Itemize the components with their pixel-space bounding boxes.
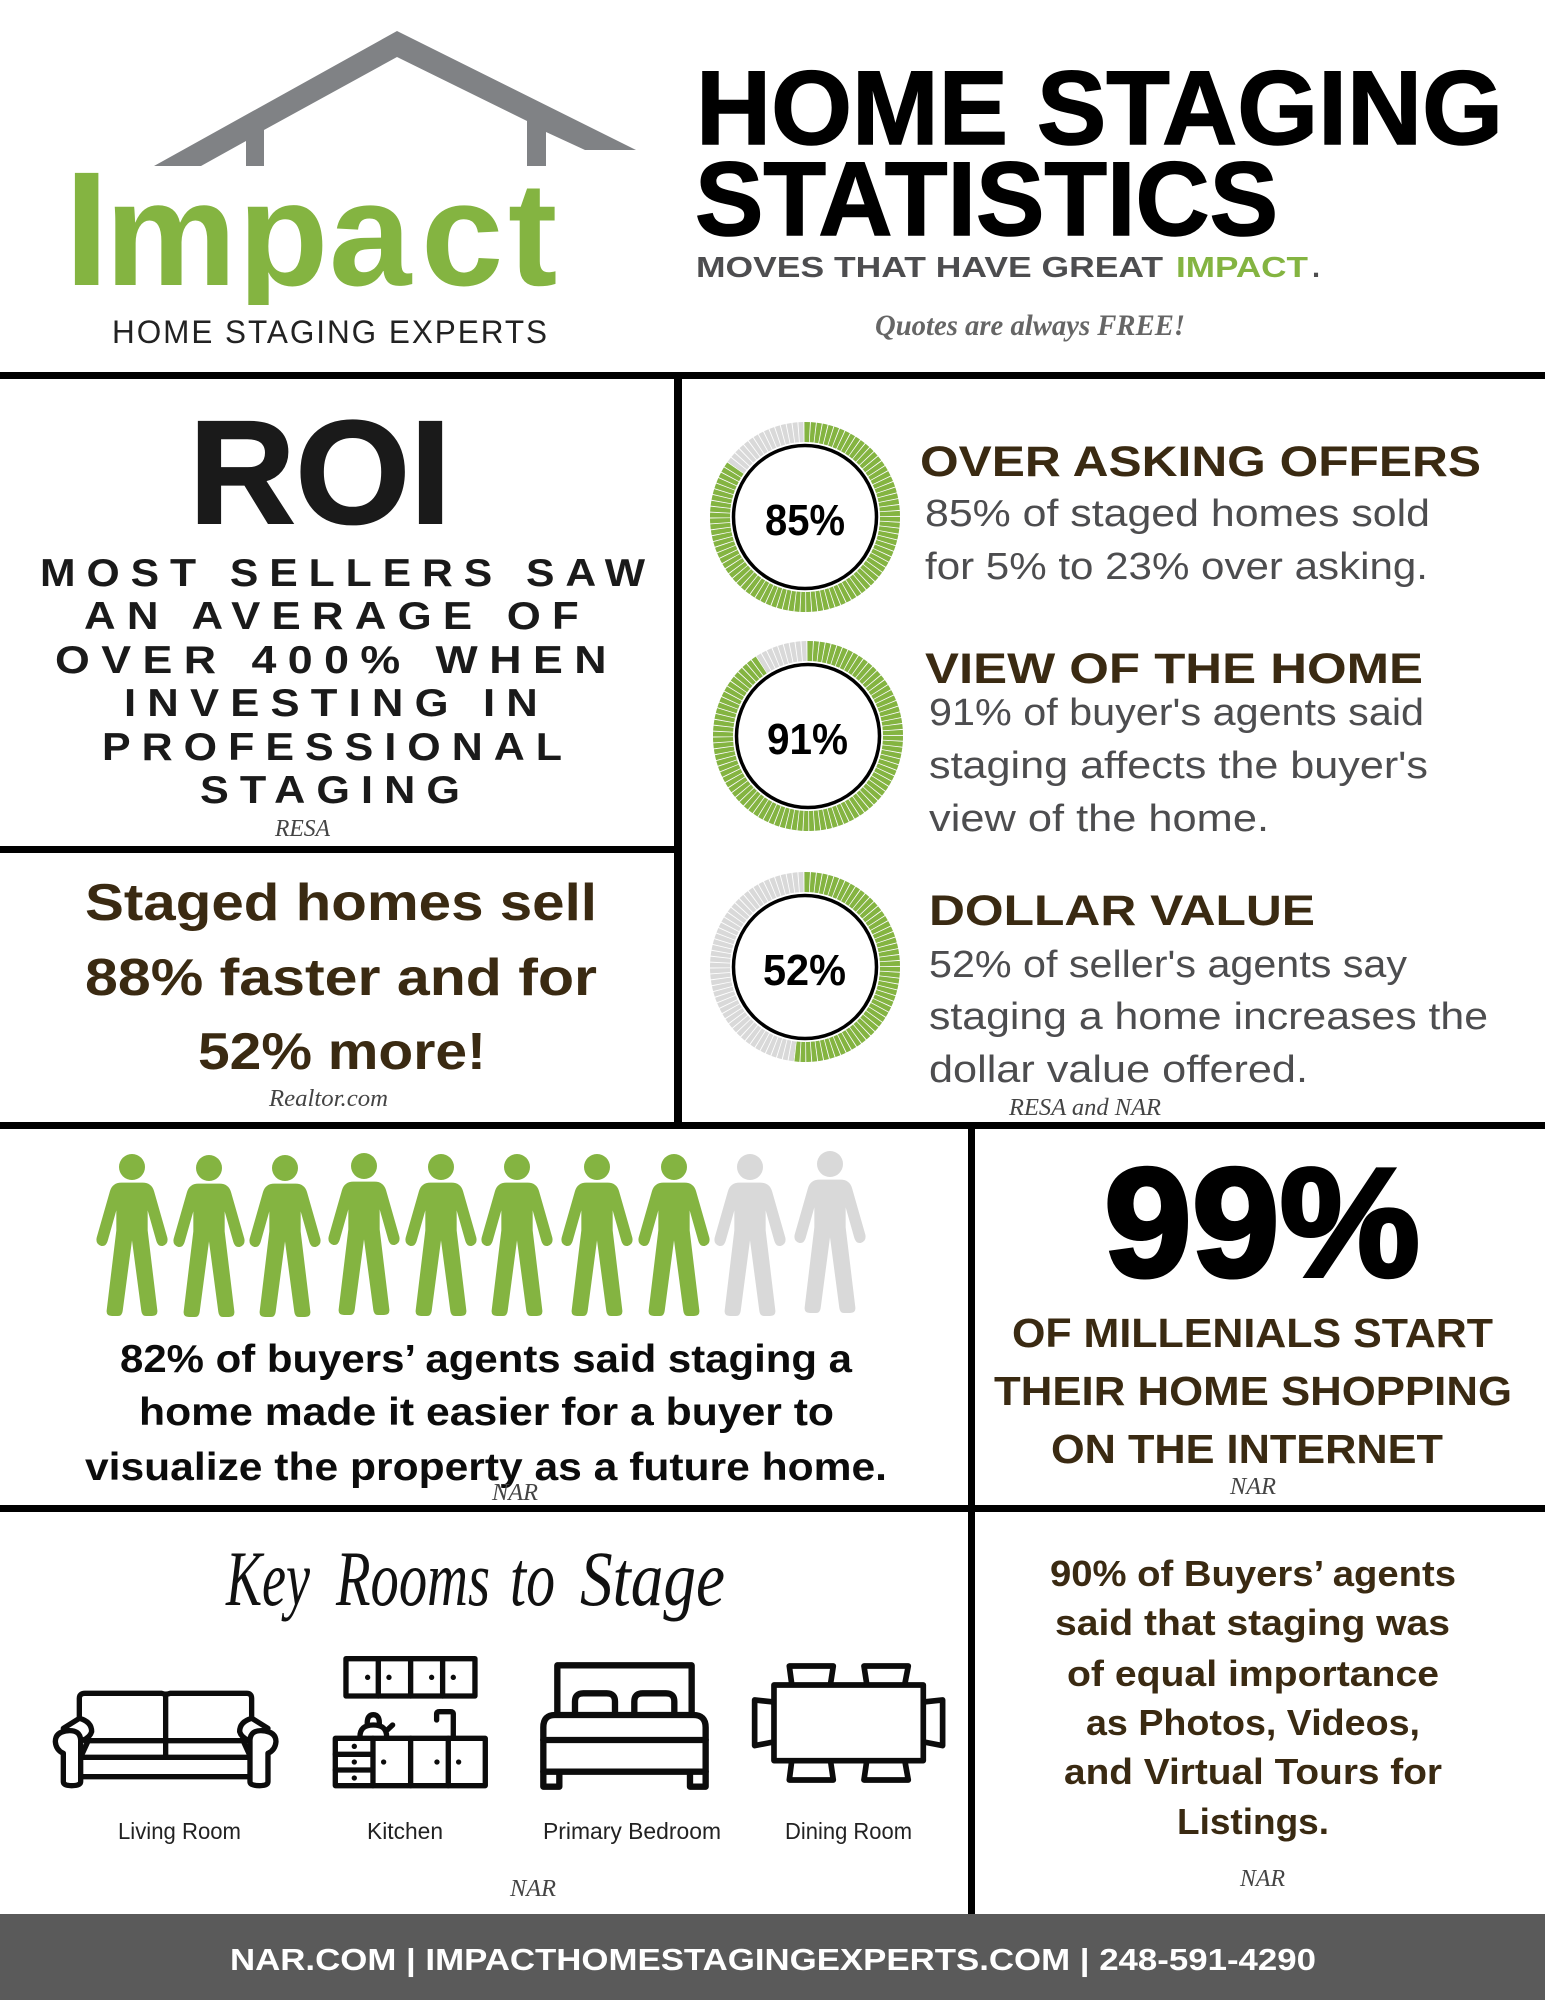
millennials text: ON THE INTERNET [1051,1426,1443,1472]
icon: sofa [55,1693,276,1786]
source: NAR: NAR [491,1480,538,1506]
text: view of the home: staging affects the buyer's [929,745,1428,787]
panel: stat rings [720,432,1488,1121]
panel: equal importance [1050,1553,1456,1892]
equal importance text: as Photos, Videos, [1086,1702,1420,1743]
equal importance text: Listings. [1177,1801,1329,1842]
logo tagline: HOME STAGING EXPERTS [112,314,549,350]
text: over asking offers: 85% of staged homes sold [925,493,1430,535]
subtitle accent: IMPACT [1176,252,1308,284]
text: view of the home: view of the home. [929,798,1269,840]
millennials text [994,1310,1512,1472]
text: over asking offers [925,493,1430,588]
equal importance text: said that staging was [1055,1602,1450,1643]
visualize text [85,1338,887,1489]
chart: 85% ring [720,432,890,602]
logo wordmark: I [64,137,109,320]
script heading: Stage [580,1535,725,1622]
icon: roof [154,31,636,166]
source: NAR: NAR [1229,1474,1276,1500]
panel: faster sale [85,874,597,1112]
ROI statement: AN AVERAGE OF [84,595,590,638]
equal importance text: 90% of Buyers’ agents [1050,1553,1456,1594]
source: NAR: NAR [509,1876,556,1902]
panel: ROI [40,391,656,842]
text: view of the home [929,692,1428,840]
text: over asking offers: for 5% to 23% over asking. [925,546,1428,588]
ROI statement: PROFESSIONAL [102,726,573,769]
source: RESA and NAR: RESA and NAR [1008,1095,1161,1121]
panel: key rooms [55,1535,943,1902]
text: view of the home: 91% of buyer's agents said [929,692,1424,734]
chart: 52% ring [720,882,890,1052]
logo wordmark: c [421,152,503,317]
visualize text: visualize the property as a future home. [85,1446,887,1489]
equal importance text [1050,1553,1456,1842]
script heading: to [510,1535,555,1622]
equal importance text: of equal importance [1067,1653,1439,1694]
text: dollar value: staging a home increases the [929,996,1488,1038]
ROI statement: STAGING [200,769,471,812]
heading: view of the home: VIEW OF THE HOME [925,645,1423,693]
subtitle period: . [1312,252,1320,284]
room label: living room: Living Room [118,1818,241,1844]
subtitle: MOVES THAT HAVE GREAT [696,252,1163,284]
title: HOME STAGING [696,50,1503,167]
logo wordmark: t [508,152,557,317]
room label: kitchen: Kitchen [367,1818,443,1844]
script heading [225,1535,725,1622]
title line two: STATISTICS [695,141,1278,258]
big number 99%: 99% [1104,1136,1420,1309]
icon: kitchen [335,1659,485,1786]
millennials text: THEIR HOME SHOPPING [994,1368,1512,1414]
quotes note: Quotes are always FREE! [875,309,1185,342]
logo wordmark: a [329,152,413,317]
title block [695,50,1503,342]
text: dollar value: 52% of seller's agents say [929,944,1407,986]
faster sale text: 88% faster and for [85,949,597,1007]
script heading: Rooms [335,1535,490,1622]
source: RESA: RESA [274,816,330,842]
logo wordmark: p [238,152,328,317]
chart: 91% ring: 91% [767,715,848,764]
logo wordmark: m [105,152,237,317]
equal importance text: and Virtual Tours for [1064,1751,1442,1792]
ROI statement: MOST SELLERS SAW [40,552,656,595]
millennials text: OF MILLENIALS START [1012,1310,1493,1356]
panel: logo [64,31,636,350]
faster sale text [85,874,597,1081]
pictogram: ten people, eight green [96,1151,866,1317]
icon: dining table [755,1666,943,1780]
panel: millennials [994,1136,1512,1500]
footer bar [0,1914,1545,2000]
icon: bed [543,1665,706,1787]
faster sale text: Staged homes sell [85,874,597,932]
text: dollar value [929,944,1488,1091]
ROI statement [40,552,656,812]
ROI statement: INVESTING IN [124,682,549,725]
chart: 85% ring: 85% [765,496,845,545]
faster sale text: 52% more! [198,1023,486,1081]
chart: 52% ring: 52% [763,946,846,995]
footer contact text: NAR.COM | IMPACTHOMESTAGINGEXPERTS.COM | 248-591-4290 [230,1942,1316,1977]
panel: visualize [85,1151,887,1506]
visualize text: 82% of buyers’ agents said staging a [120,1338,852,1381]
room label: dining room: Dining Room [785,1818,912,1844]
heading: over asking offers: OVER ASKING OFFERS [920,438,1481,486]
ROI heading: ROI [189,391,451,555]
heading: dollar value: DOLLAR VALUE [929,887,1315,935]
source: NAR: NAR [1239,1866,1285,1892]
chart: 91% ring [723,651,893,821]
script heading: Key [225,1535,310,1622]
source: Realtor.com: Realtor.com [268,1086,388,1112]
text: dollar value: dollar value offered. [929,1049,1308,1091]
ROI statement: OVER 400% WHEN [55,639,618,682]
room label: primary bedroom: Primary Bedroom [543,1818,721,1844]
visualize text: home made it easier for a buyer to [139,1391,834,1434]
